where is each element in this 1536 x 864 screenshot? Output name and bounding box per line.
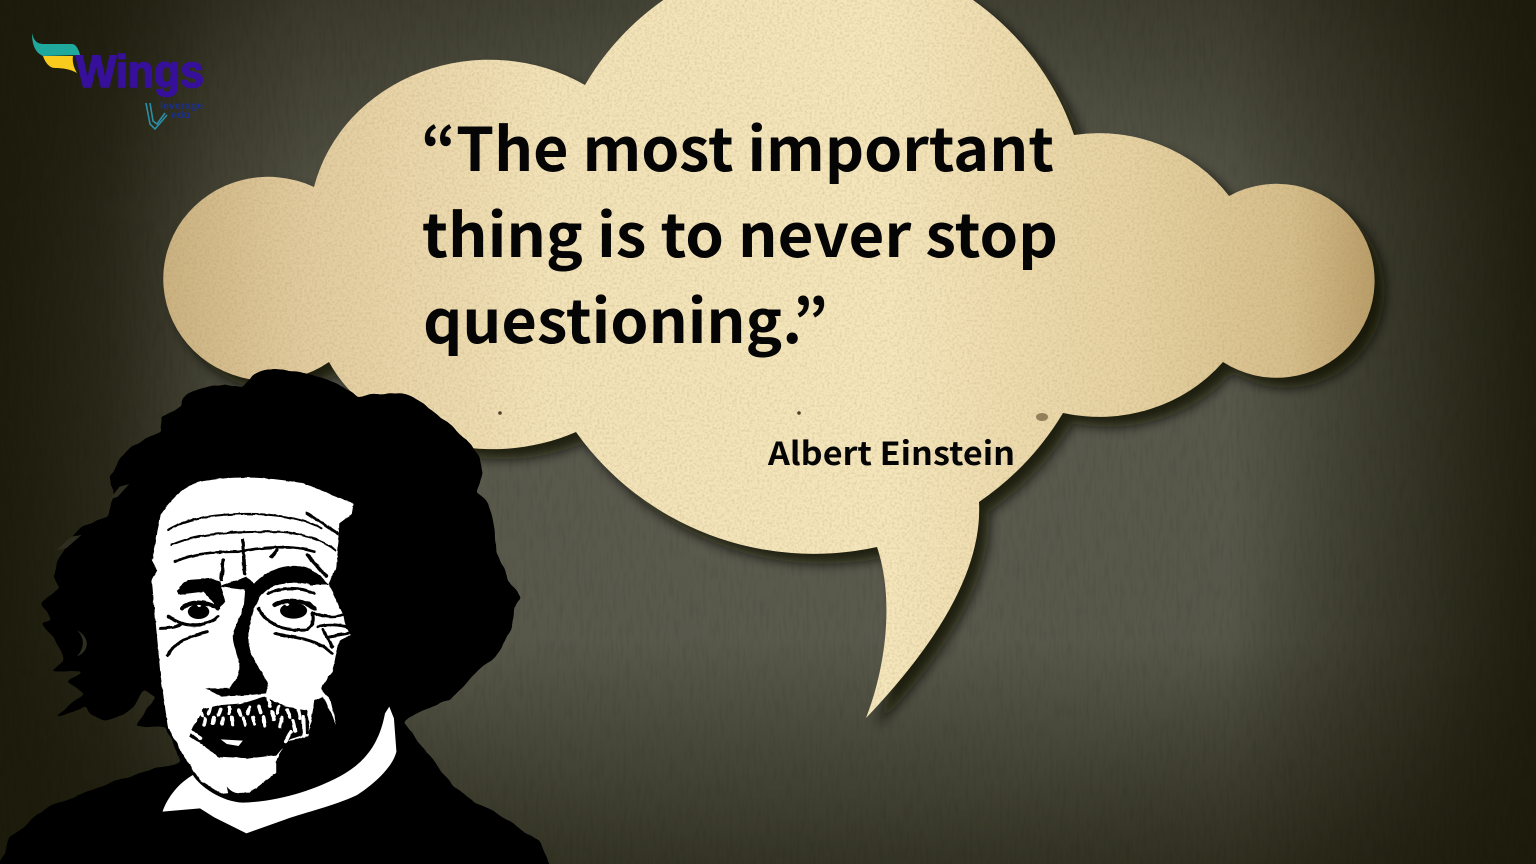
logo wing: yellow <box>43 56 77 73</box>
forehead wrinkles <box>168 513 337 580</box>
right brow and nose shadow <box>205 566 329 697</box>
hair gaps <box>56 484 129 657</box>
logo wing: teal <box>32 33 80 56</box>
logo wordmark: Wings <box>76 46 204 97</box>
collar <box>162 707 396 833</box>
left brow <box>177 578 226 608</box>
moustache and mouth <box>189 697 310 758</box>
Einstein portrait silhouette <box>0 370 553 864</box>
quote line 3: questioning.” <box>423 274 828 361</box>
logo: Wings by Leverage Edu <box>32 33 204 129</box>
logo mark: leverage edu chevron <box>146 103 167 129</box>
logo sub-text: edu: edu <box>171 110 190 121</box>
chin shadow mark <box>227 787 246 795</box>
logo sub-text: leverage: leverage <box>160 101 203 112</box>
eye wrinkles <box>161 588 348 655</box>
quote text <box>421 102 1058 361</box>
left eye <box>188 604 209 619</box>
quote line 1: “The most important <box>421 102 1054 189</box>
speech bubble: paper cloud with tail <box>150 0 1390 730</box>
quote line 2: thing is to never stop <box>422 188 1058 275</box>
hair and jacket <box>0 370 553 864</box>
right eye <box>280 603 307 619</box>
moustache white flecks <box>189 699 304 742</box>
author attribution: Albert Einstein <box>767 429 1015 475</box>
speech bubble shadow <box>173 0 1385 728</box>
eye highlights <box>197 602 289 607</box>
lower lip highlight <box>221 739 243 746</box>
face <box>152 477 354 793</box>
